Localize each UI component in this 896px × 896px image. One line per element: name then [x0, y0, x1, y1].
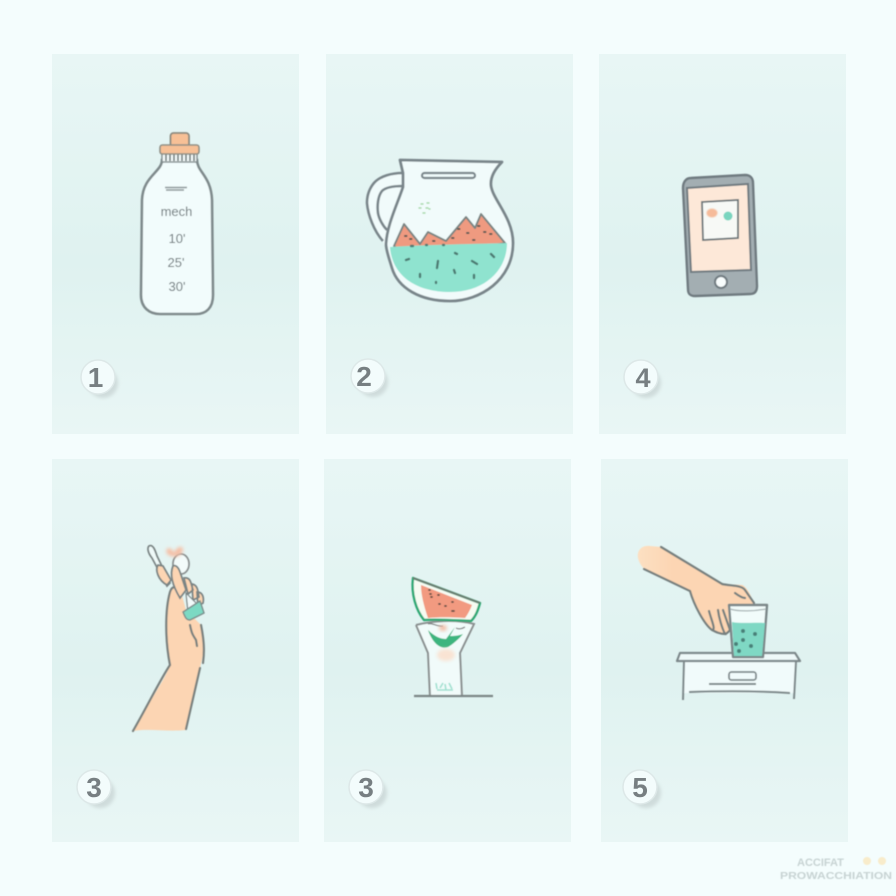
panel: step 1 background [52, 54, 299, 434]
number badge 1 [81, 360, 118, 398]
number badge 2 [351, 359, 388, 397]
number badge 3 (middle): 3 [358, 772, 374, 803]
panel: step 4 background [599, 54, 846, 434]
icon: pitcher with watermelon [367, 160, 513, 301]
panel: second step 3 background [324, 459, 571, 842]
bottle label: mech: mech [161, 204, 192, 219]
table [677, 653, 800, 700]
number badge 3 (left): 3 [86, 772, 102, 803]
melon slice [413, 578, 480, 621]
number badge 3 (left) [77, 770, 115, 808]
watermark [780, 857, 892, 882]
panel: step 2 background [326, 54, 573, 434]
panel: step 5 background [601, 459, 848, 842]
number badge 2: 2 [356, 361, 372, 392]
bottle mark: 30': 30' [169, 279, 185, 294]
icon: water bottle [141, 133, 213, 314]
icon: hand holding dropper [133, 546, 204, 731]
icon: smartphone [683, 175, 757, 296]
arm [638, 546, 754, 634]
number badge 3 (middle) [349, 770, 387, 808]
bottle mark: 10': 10' [169, 231, 185, 246]
number badge 1: 1 [88, 362, 103, 393]
watermark: ACCIFAT [797, 857, 844, 869]
bottle mark: 25': 25' [168, 255, 184, 270]
number badge 5 [623, 770, 661, 808]
leaf [428, 627, 463, 648]
number badge 4 [624, 360, 661, 398]
number badge 5: 5 [632, 772, 648, 803]
icon: watermelon slice on glass [413, 578, 493, 697]
watermark: PROWACCHIATION [780, 870, 892, 882]
watermelon pieces in pitcher [394, 214, 505, 252]
icon: hand placing glass on table [638, 546, 800, 700]
glass [729, 605, 767, 657]
number badge 4: 4 [635, 363, 651, 393]
panel: step 3 background [52, 459, 299, 842]
liquid [390, 243, 507, 292]
